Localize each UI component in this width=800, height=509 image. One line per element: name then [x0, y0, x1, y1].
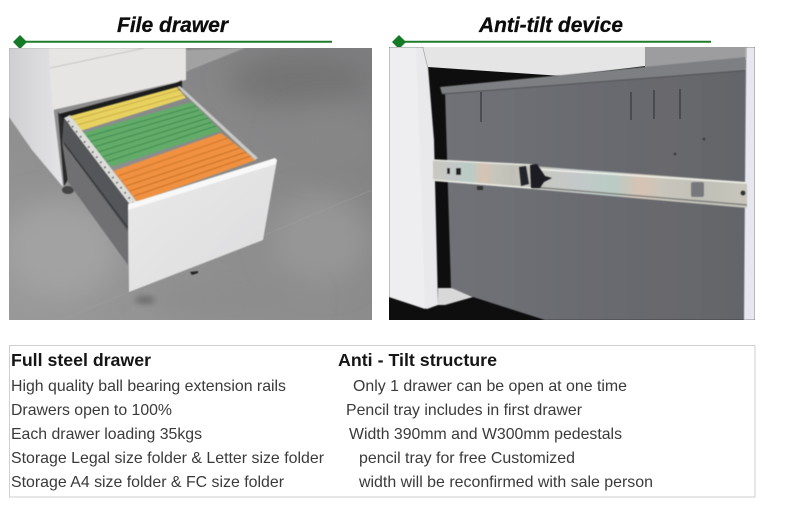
column: Anti - Tilt structure: Only 1 drawer can be open at one time [353, 378, 627, 395]
column: Anti - Tilt structure [338, 350, 653, 491]
drawer front panel [128, 158, 277, 292]
hanging file folders [70, 87, 256, 202]
column: Full steel drawer: High quality ball bearing extension rails [11, 378, 286, 395]
column: Anti - Tilt structure: width will be reconfirmed with sale person [358, 474, 653, 491]
column: Full steel drawer: Full steel drawer [11, 350, 151, 370]
column: Full steel drawer: Storage A4 size folder & FC size folder [11, 474, 284, 491]
column: Anti - Tilt structure: Anti - Tilt structure [338, 350, 497, 370]
ball bearing slide rail [433, 160, 747, 208]
floor [0, 48, 380, 320]
photo: anti-tilt rail detail [389, 47, 755, 320]
column: Full steel drawer: Drawers open to 100% [11, 402, 172, 419]
column: Full steel drawer: Each drawer loading 35kgs [11, 426, 202, 443]
black rail latch [519, 164, 552, 188]
heading rule: File drawer [13, 35, 332, 49]
drawer top lip [440, 57, 746, 94]
column: Anti - Tilt structure: pencil tray for free Customized [359, 450, 575, 467]
column: Anti - Tilt structure: Width 390mm and W300mm pedestals [349, 426, 622, 443]
title: File drawer: File drawer [117, 13, 230, 37]
drawer side [62, 118, 198, 275]
drawer back panel [445, 68, 746, 320]
photo: open file drawer [0, 48, 380, 320]
cabinet body [9, 48, 186, 194]
white cabinet frame [389, 47, 755, 320]
heading rule: Anti-tilt device [392, 35, 711, 49]
spec table panel [10, 346, 755, 497]
column: Anti - Tilt structure: Pencil tray includes in first drawer [346, 402, 582, 419]
column: Full steel drawer: Storage Legal size folder & Letter size folder [11, 450, 324, 467]
cabinet interior background [389, 47, 755, 320]
drawer rails [64, 86, 258, 207]
title: Anti-tilt device: Anti-tilt device [478, 13, 623, 37]
slots [481, 89, 706, 156]
column: Full steel drawer [11, 350, 324, 491]
